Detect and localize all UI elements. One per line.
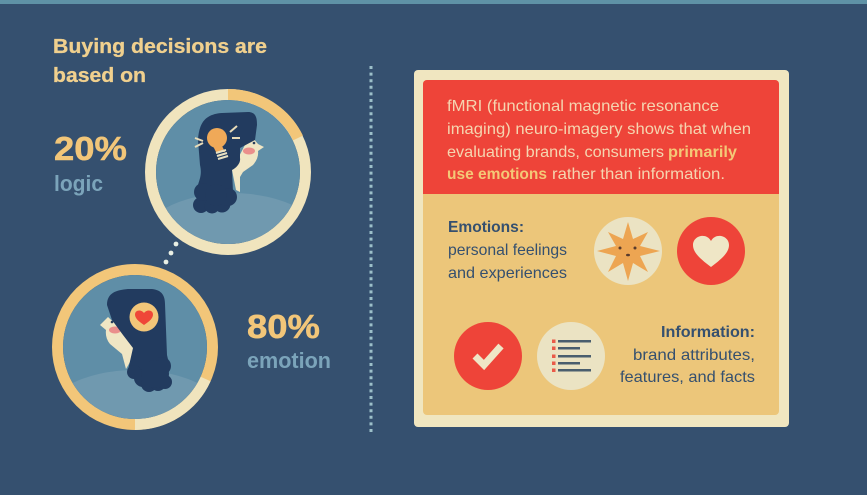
heading [53, 36, 267, 87]
icon: list [537, 322, 605, 390]
icon: check mark [454, 322, 522, 390]
icon: heart [677, 217, 745, 285]
fMRI text block [447, 98, 751, 183]
information definition: features, and facts [620, 369, 755, 386]
fMRI text block: rather than information. [552, 166, 725, 183]
stat: 20% logic: 20% [54, 130, 127, 167]
stat: 20% logic [54, 130, 127, 196]
fMRI text block: use emotions [447, 166, 547, 183]
emotions definition: and experiences [448, 265, 567, 282]
information definition [620, 324, 755, 386]
emotions definition: personal feelings [448, 242, 567, 259]
icon: heart in brain [130, 302, 158, 332]
emotions definition: Emotions: [448, 219, 524, 236]
stat: 80% emotion [247, 308, 331, 373]
icon: light bulb [195, 126, 240, 159]
heading: Buying decisions are [53, 36, 267, 58]
emotions definition [448, 219, 567, 282]
connecting dots [164, 242, 178, 264]
fMRI text block: evaluating brands, consumers [447, 144, 664, 161]
face [232, 138, 264, 192]
logic portrait circle [145, 89, 311, 255]
information definition: Information: [661, 324, 755, 341]
fMRI text block: fMRI (functional magnetic resonance [447, 98, 719, 115]
emotion portrait circle [52, 264, 218, 430]
hair [107, 289, 172, 392]
fMRI text block: imaging) neuro-imagery shows that when [447, 121, 751, 138]
face [100, 317, 134, 369]
stat: 20% logic: logic [54, 171, 103, 196]
panel: fMRI explanation [414, 70, 789, 427]
information definition: brand attributes, [633, 347, 755, 364]
icon: sun face [594, 217, 662, 285]
hair [193, 112, 257, 214]
stat: 80% emotion: 80% [247, 308, 320, 345]
stat: 80% emotion: emotion [247, 348, 331, 373]
fMRI text block: primarily [668, 144, 737, 161]
heading: based on [53, 65, 146, 87]
